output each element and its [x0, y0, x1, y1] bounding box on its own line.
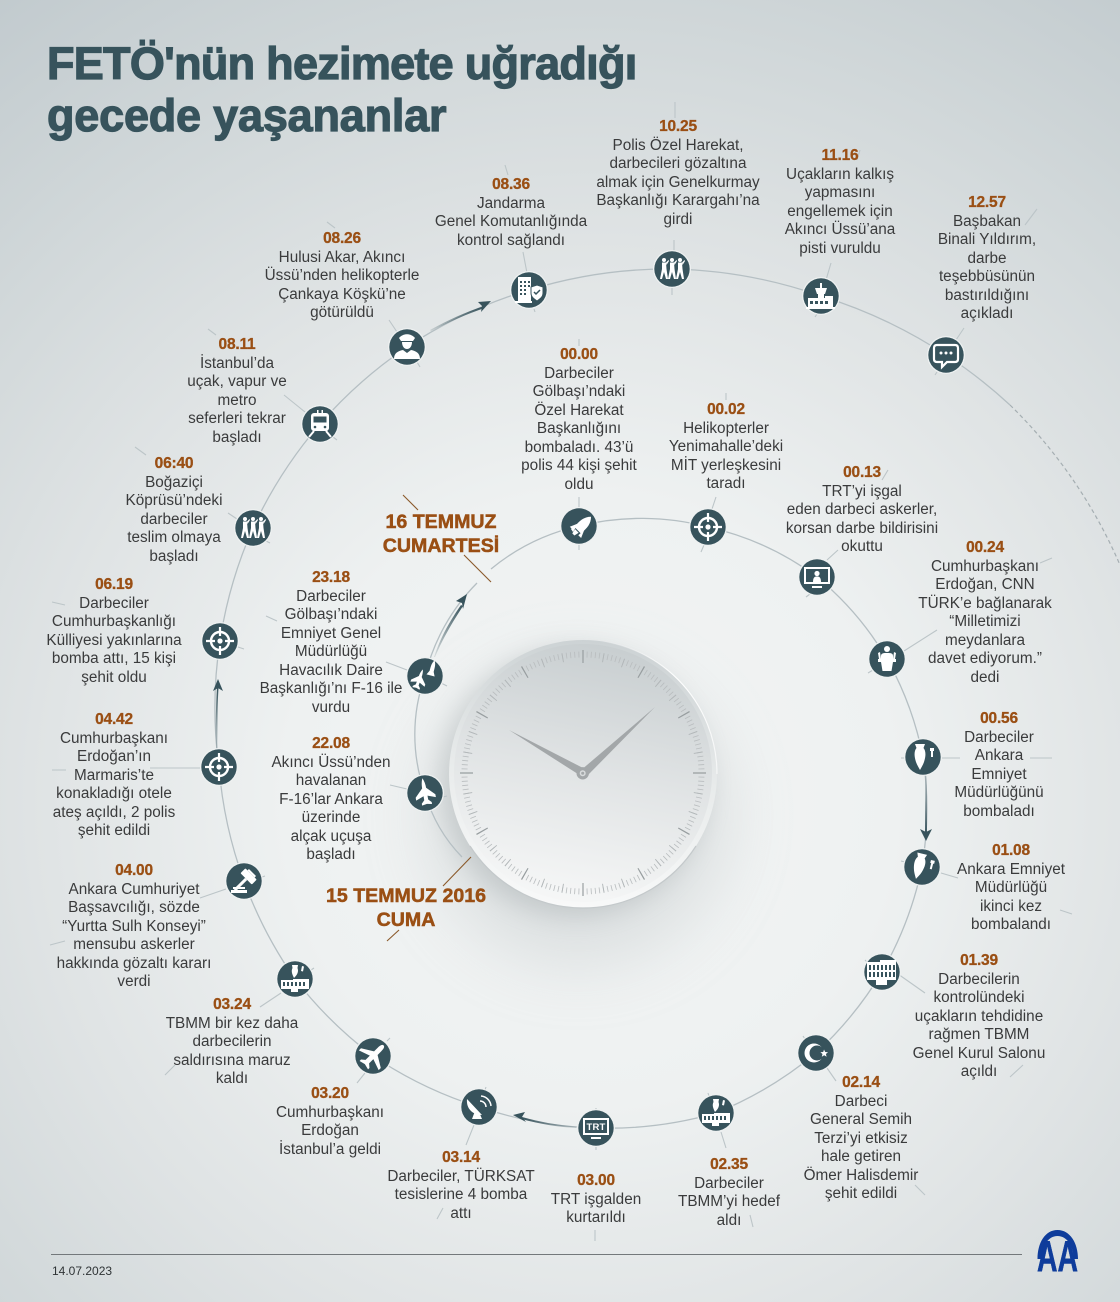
- event 04.00: “Yurtta Sulh Konseyi”: [62, 918, 206, 934]
- event 08.26: [265, 230, 419, 321]
- event 03.24: saldırısına maruz: [173, 1052, 291, 1068]
- event 04.00: 04.00: [115, 862, 153, 879]
- event 01.39: Darbecilerin: [938, 970, 1020, 988]
- event 23.18: Emniyet Genel: [281, 624, 381, 642]
- event 00.24: meydanlara: [945, 632, 1025, 648]
- leader ticks: [50, 102, 1072, 1241]
- event 00.00: polis 44 kişi şehit: [521, 457, 637, 474]
- event 08.11: metro: [217, 392, 257, 408]
- date: 15 Temmuz 2016 Cuma: [326, 885, 486, 931]
- event 04.00: Başsavcılığı, sözde: [68, 899, 200, 916]
- event 08.26: Üssü’nden helikopterle: [265, 267, 419, 284]
- event 04.42: 04.42: [95, 711, 133, 728]
- event 02.14: Terzi’yi etkisiz: [814, 1130, 908, 1146]
- event 10.25: almak için Genelkurmay: [596, 174, 760, 190]
- event 10.25: Polis Özel Harekat,: [613, 136, 743, 154]
- event 22.08: üzerinde: [302, 809, 360, 826]
- event 00.24: Cumhurbaşkanı: [931, 558, 1039, 574]
- event 03.00: TRT işgalden: [551, 1190, 641, 1208]
- event 06.19: Külliyesi yakınlarına: [46, 632, 182, 648]
- event 04.42: konakladığı otele: [56, 785, 172, 802]
- icon: 03.14 satellite dish: [460, 1088, 498, 1126]
- clock hands: [509, 707, 655, 780]
- event 08.36: kontrol sağlandı: [457, 232, 565, 248]
- event 11.16: Akıncı Üssü’ana: [785, 221, 895, 238]
- event 04.42: [53, 711, 175, 839]
- event 02.35: 02.35: [710, 1156, 748, 1173]
- event 23.18: Havacılık Daire: [279, 662, 383, 678]
- event 22.08: F-16’lar Ankara: [279, 790, 383, 808]
- event 10.25: girdi: [664, 210, 692, 228]
- event 00.02: [669, 401, 783, 492]
- event 00.00: Başkanlığını: [537, 420, 621, 437]
- event 06:40: başladı: [149, 548, 199, 564]
- icon: 22.08 jet: [406, 774, 444, 812]
- event 10.25: darbecileri gözaltına: [610, 155, 746, 172]
- event 03.00: 03.00: [577, 1172, 615, 1189]
- event 12.57: 12.57: [968, 194, 1006, 211]
- event 02.14: [804, 1074, 918, 1202]
- event 11.16: pisti vuruldu: [799, 240, 881, 256]
- event 02.14: General Semih: [810, 1111, 912, 1128]
- event 22.08: havalanan: [296, 772, 366, 789]
- date: 16 Temmuz Cumartesi: 16 TEMMUZ: [385, 511, 497, 533]
- event 01.39: uçakların tehdidine: [915, 1008, 1043, 1024]
- clock ticks: [464, 654, 702, 892]
- icon: 01.39 parliament: [863, 953, 901, 991]
- event 08.11: uçak, vapur ve: [187, 373, 287, 390]
- event 03.20: Erdoğan: [301, 1122, 359, 1139]
- event 00.56: bombaladı: [963, 802, 1035, 820]
- event 00.02: MİT yerleşkesini: [671, 456, 781, 474]
- event 00.13: okuttu: [841, 538, 883, 555]
- event 00.13: korsan darbe bildirisini: [786, 520, 938, 536]
- event 00.00: bombaladı. 43’ü: [525, 438, 633, 456]
- icon: 04.00 gavel: [225, 862, 263, 900]
- event 08.26: 08.26: [323, 230, 361, 247]
- event 11.16: 11.16: [822, 147, 858, 164]
- icon: 08.26 officer: [388, 328, 426, 366]
- icon: 00.02 target: [689, 508, 727, 546]
- event 10.25: 10.25: [659, 118, 697, 135]
- event 08.11: seferleri tekrar: [188, 410, 286, 427]
- event 00.24: dedi: [971, 668, 999, 686]
- event 00.00: oldu: [565, 476, 593, 492]
- icon: 11.16 airport tower: [802, 277, 840, 315]
- event 00.13: 00.13: [843, 464, 881, 481]
- event 12.57: darbe: [967, 250, 1007, 266]
- event 00.13: [786, 464, 938, 555]
- event 23.18: Darbeciler: [296, 588, 366, 604]
- icon: 04.42 target: [200, 748, 238, 786]
- event 00.56: Emniyet: [971, 766, 1027, 782]
- date: 15 Temmuz 2016 Cuma: CUMA: [377, 909, 435, 931]
- event 06.19: Darbeciler: [79, 594, 149, 612]
- event 02.14: şehit edildi: [825, 1185, 897, 1202]
- event 00.00: [521, 346, 637, 492]
- icon: 02.14 crescent and star: [797, 1034, 835, 1072]
- event 00.02: 00.02: [707, 401, 745, 418]
- event 00.13: eden darbeci askerler,: [787, 501, 937, 518]
- footer line: [51, 1254, 1022, 1256]
- event 03.00: kurtarıldı: [566, 1209, 626, 1226]
- event 03.24: kaldı: [216, 1070, 248, 1087]
- date: 16 Temmuz Cumartesi: CUMARTESİ: [383, 535, 499, 557]
- event 12.57: Başbakan: [953, 212, 1021, 230]
- event 03.14: Darbeciler, TÜRKSAT: [387, 1168, 535, 1184]
- event 00.56: Müdürlüğünü: [954, 784, 1044, 801]
- arrow: 03.00 to 03.14: [513, 1112, 576, 1128]
- event 00.00: 00.00: [560, 346, 598, 363]
- event 06.19: [46, 576, 182, 686]
- date: 15 Temmuz 2016 Cuma: 15 TEMMUZ 2016: [326, 885, 486, 907]
- event 00.24: [918, 539, 1052, 686]
- event 01.39: rağmen TBMM: [929, 1026, 1029, 1043]
- event 03.14: [387, 1149, 535, 1222]
- spiral timeline line: [215, 269, 1120, 1128]
- event 00.02: Yenimahalle’deki: [669, 438, 783, 455]
- event 02.35: [678, 1156, 780, 1228]
- event 02.35: Darbeciler: [694, 1174, 764, 1192]
- event 03.20: Cumhurbaşkanı: [276, 1104, 384, 1120]
- clock shadow: [428, 648, 728, 965]
- icon: 00.13 broadcast screen: [798, 558, 836, 596]
- event 12.57: açıkladı: [961, 305, 1013, 322]
- event 03.20: [276, 1085, 384, 1158]
- event 23.18: vurdu: [312, 698, 350, 716]
- event 00.56: 00.56: [980, 710, 1018, 727]
- event 06.19: Cumhurbaşkanlığı: [52, 613, 176, 630]
- icon: 06:40 soldiers: [234, 509, 272, 547]
- event 01.08: [957, 842, 1065, 933]
- event 03.24: [166, 996, 298, 1087]
- arrow: 08.26 to 08.36: [430, 301, 491, 331]
- event 04.42: Cumhurbaşkanı: [60, 730, 168, 746]
- event 12.57: Binali Yıldırım,: [938, 231, 1036, 248]
- event 06:40: [126, 455, 222, 564]
- AA logo: [1037, 1230, 1078, 1281]
- event 00.24: TÜRK’e bağlanarak: [918, 594, 1052, 612]
- event 08.11: başladı: [212, 428, 262, 446]
- event 08.36: Genel Komutanlığında: [435, 213, 587, 230]
- event 00.24: davet ediyorum.”: [928, 650, 1042, 667]
- event 08.26: Çankaya Köşkü’ne: [278, 286, 406, 302]
- event 02.14: Darbeci: [835, 1092, 887, 1110]
- event 03.14: 03.14: [442, 1149, 480, 1166]
- icon: 01.08 bomb: [903, 848, 941, 886]
- icon: 00.56 bomb: [904, 738, 942, 776]
- event 00.56: Ankara: [975, 747, 1023, 764]
- event 06:40: 06:40: [155, 455, 193, 472]
- event 06:40: Köprüsü’ndeki: [126, 492, 222, 509]
- event 12.57: bastırıldığını: [945, 286, 1029, 304]
- event 03.24: TBMM bir kez daha: [166, 1014, 298, 1032]
- arrow: 04.42 to 06.19: [213, 679, 223, 748]
- event 04.00: hakkında gözaltı kararı: [57, 954, 211, 972]
- event 11.16: Uçakların kalkış: [786, 166, 894, 182]
- event 04.42: Erdoğan’ın: [77, 748, 151, 765]
- event 04.00: Ankara Cumhuriyet: [69, 880, 199, 898]
- event 23.18: 23.18: [312, 569, 350, 586]
- icon: 06.19 target: [201, 622, 239, 660]
- event 00.02: taradı: [706, 475, 746, 492]
- event 08.11: İstanbul’da: [200, 354, 274, 372]
- AA logo: AA: [1037, 1232, 1078, 1281]
- event 03.14: tesislerine 4 bomba: [395, 1186, 527, 1203]
- event 10.25: Başkanlığı Karargahı’na: [596, 192, 760, 209]
- event 02.35: TBMM’yi hedef: [678, 1193, 780, 1210]
- event 06.19: bomba attı, 15 kişi: [52, 650, 176, 667]
- event 00.00: Özel Harekat: [534, 402, 624, 418]
- event 04.00: mensubu askerler: [73, 936, 195, 953]
- icon: 08.36 building with shield: [510, 271, 548, 309]
- clock: [449, 640, 717, 908]
- icon: 12.57 speech bubble: [927, 336, 965, 374]
- event 12.57: [938, 194, 1036, 322]
- event 00.24: “Milletimizi: [949, 613, 1021, 630]
- icon: 00.00 rocket: [560, 507, 598, 545]
- event 11.16: yapmasını: [805, 184, 875, 201]
- icon: 00.24 podium: [868, 640, 906, 678]
- event 06.19: şehit oldu: [81, 668, 147, 686]
- event 01.08: ikinci kez: [980, 898, 1042, 914]
- title: [47, 38, 637, 142]
- arrow: 23.18 to 16 Temmuz: [434, 594, 467, 657]
- event 08.36: 08.36: [492, 176, 530, 193]
- event 00.56: [954, 710, 1044, 820]
- event 00.56: Darbeciler: [964, 728, 1034, 746]
- event 01.08: bombalandı: [971, 916, 1051, 933]
- event 04.00: verdi: [117, 973, 151, 990]
- event 08.26: Hulusi Akar, Akıncı: [279, 248, 405, 266]
- event 04.42: ateş açıldı, 2 polis: [53, 804, 175, 820]
- event 23.18: Gölbaşı’ndaki: [285, 606, 377, 623]
- event 22.08: Akıncı Üssü’nden: [271, 754, 391, 770]
- event 08.11: 08.11: [219, 336, 255, 353]
- event 01.08: 01.08: [992, 842, 1030, 859]
- event 00.00: Gölbaşı’ndaki: [533, 383, 625, 400]
- event 00.02: Helikopterler: [683, 420, 769, 436]
- event 03.24: darbecilerin: [192, 1033, 272, 1050]
- event 22.08: 22.08: [312, 735, 350, 752]
- event 00.24: Erdoğan, CNN: [935, 576, 1035, 593]
- event 22.08: alçak uçuşa: [291, 828, 371, 844]
- event 22.08: [271, 735, 391, 863]
- event 08.26: götürüldü: [310, 304, 374, 321]
- event 23.18: Başkanlığı’nı F-16 ile: [260, 680, 402, 697]
- event 10.25: [596, 118, 760, 228]
- event 06:40: darbeciler: [140, 510, 208, 528]
- event 04.42: Marmaris’te: [74, 766, 154, 784]
- icon: 03.00 TRT screen: [577, 1109, 615, 1147]
- icon: 03.20 plane: [354, 1035, 394, 1075]
- event 23.18: Müdürlüğü: [295, 643, 367, 660]
- arrow: 00.56 to 01.08: [920, 776, 932, 841]
- event 00.00: Darbeciler: [544, 364, 614, 382]
- event 03.20: 03.20: [311, 1085, 349, 1102]
- icon: 08.11 train: [301, 405, 339, 443]
- title: gecede yaşananlar: [47, 90, 446, 141]
- event 22.08: başladı: [306, 846, 356, 863]
- event 11.16: engellemek için: [787, 202, 893, 220]
- event 01.39: kontrolündeki: [933, 989, 1024, 1006]
- event 01.39: Genel Kurul Salonu: [913, 1044, 1045, 1062]
- event 03.20: İstanbul’a geldi: [279, 1140, 381, 1158]
- event 06:40: teslim olmaya: [127, 529, 221, 546]
- event 01.08: Ankara Emniyet: [957, 860, 1065, 878]
- event 02.14: hale getiren: [821, 1148, 901, 1165]
- event 02.35: aldı: [717, 1212, 741, 1228]
- event 06.19: 06.19: [95, 576, 133, 593]
- icon: 02.35 bombed parliament: [697, 1094, 735, 1132]
- event 11.16: [784, 147, 896, 256]
- icon: 23.18 jet and missile: [406, 657, 444, 695]
- event 08.36: [435, 176, 588, 248]
- event 08.11: [187, 336, 287, 446]
- event 03.14: attı: [450, 1204, 472, 1222]
- event 01.39: [913, 952, 1045, 1080]
- event 01.08: Müdürlüğü: [975, 879, 1047, 896]
- title: FETÖ'nün hezimete uğradığı: [47, 38, 637, 89]
- icon: 03.24 bombed parliament: [276, 960, 314, 998]
- event 08.36: Jandarma: [477, 194, 545, 212]
- event 12.57: teşebbüsünün: [939, 268, 1035, 285]
- event 00.13: TRT’yi işgal: [822, 482, 902, 500]
- event 01.39: 01.39: [960, 952, 998, 969]
- event 03.24: 03.24: [213, 996, 251, 1013]
- event 02.14: 02.14: [842, 1074, 880, 1091]
- event 23.18: [260, 569, 402, 716]
- event 01.39: açıldı: [961, 1063, 997, 1080]
- event 02.14: Ömer Halisdemir: [804, 1166, 918, 1184]
- footer date: 14.07.2023: [52, 1264, 112, 1278]
- event 04.00: [57, 862, 211, 990]
- event 00.24: 00.24: [966, 539, 1004, 556]
- event 03.00: [551, 1172, 641, 1226]
- event 04.42: şehit edildi: [78, 822, 150, 839]
- date: 16 Temmuz Cumartesi: [383, 511, 499, 557]
- event 06:40: Boğaziçi: [145, 474, 203, 490]
- icon: 10.25 soldiers: [653, 250, 691, 288]
- brown date lines: [387, 495, 491, 941]
